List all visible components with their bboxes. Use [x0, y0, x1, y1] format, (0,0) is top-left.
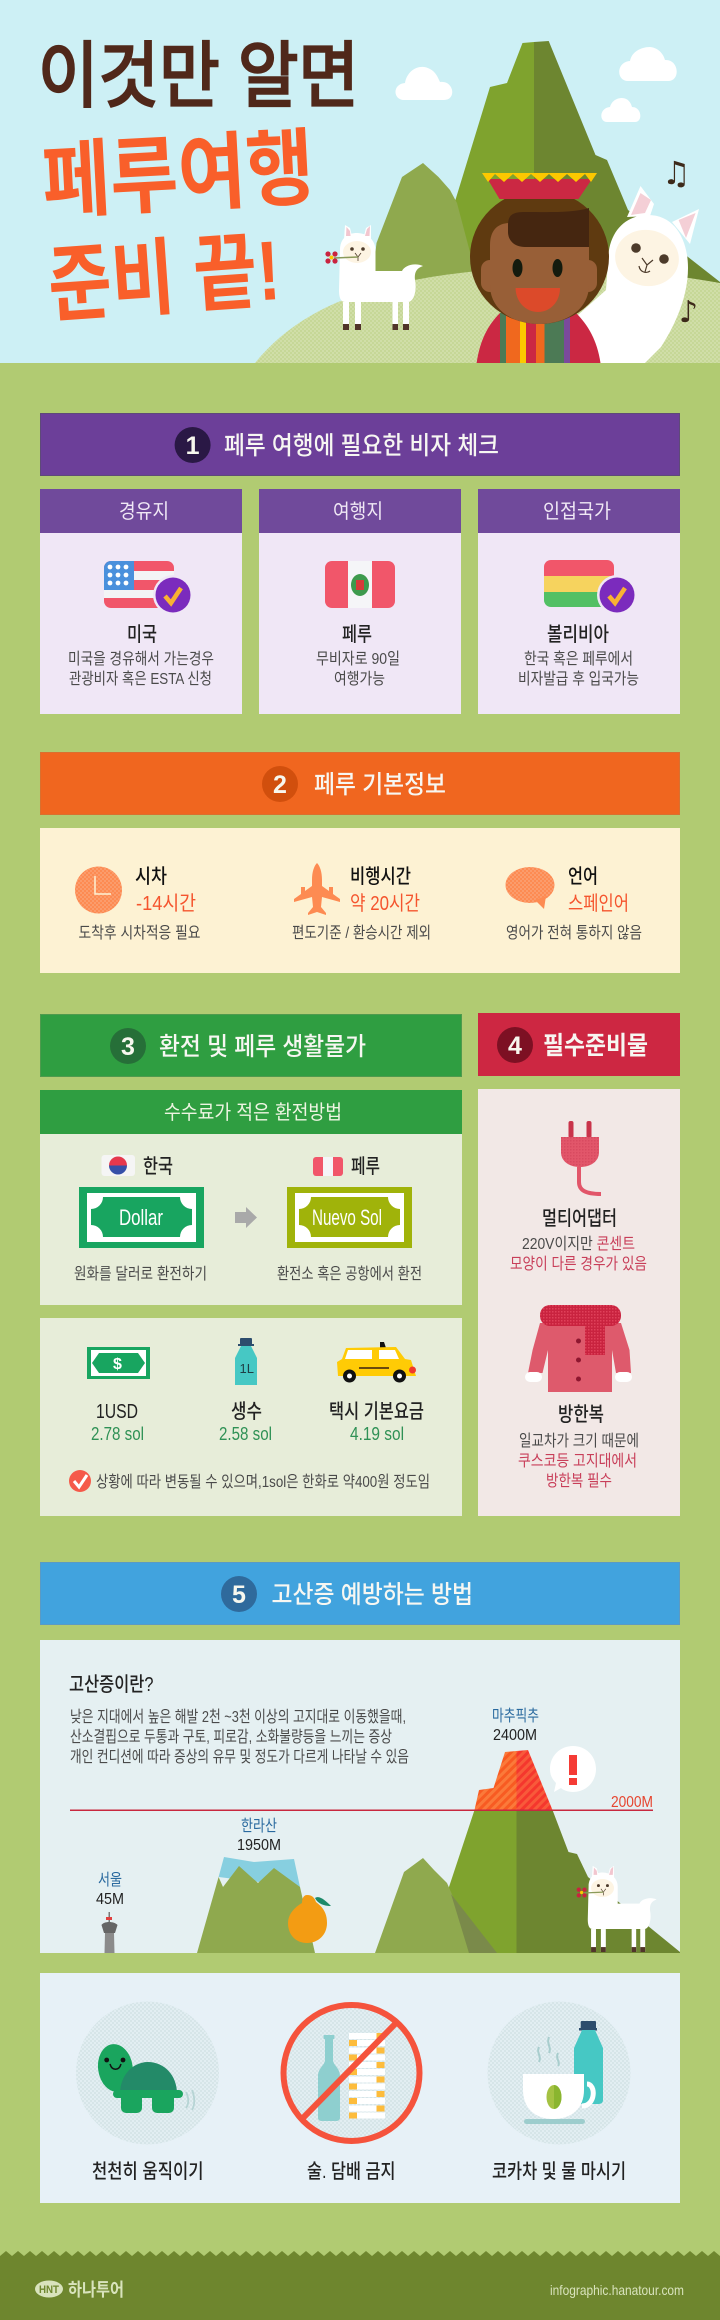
info: flight time: [292, 863, 431, 942]
panel: exchange method: 원화를 달러로 환전하기: [74, 1265, 207, 1283]
hill: [255, 268, 720, 363]
panel: altitude sickness: 45M: [96, 1891, 124, 1908]
icon: cloud 3: [601, 98, 640, 122]
panel: essentials: 방한복: [558, 1403, 604, 1426]
mountain: Machu Picchu: [425, 1750, 680, 1953]
title line 2: 페루여행: [40, 121, 316, 229]
panel: basic info: [40, 828, 680, 973]
tip: no alcohol or tobacco: 술. 담배 금지: [307, 2160, 396, 2183]
icon: prohibition sign: [284, 2005, 420, 2141]
panel: neighbouring country: [478, 489, 680, 714]
panel: essentials: [478, 1089, 680, 1516]
panel: essentials: 쿠스코등 고지대에서: [518, 1452, 637, 1470]
panel: essentials: 220V이지만 콘센트: [522, 1235, 635, 1253]
panel: altitude sickness: [40, 1640, 680, 1953]
section 1 header: 1: [186, 432, 200, 460]
tip: no alcohol or tobacco: [284, 2005, 420, 2183]
icon: steam: [538, 2037, 559, 2066]
panel: transit country: 미국을 경유해서 가는경우: [68, 650, 214, 668]
section 1 header: 페루 여행에 필요한 비자 체크: [224, 432, 499, 460]
info: language: [506, 865, 642, 942]
icon: winter coat: [525, 1305, 632, 1392]
title line 1: 이것만 알면: [38, 37, 359, 117]
mountain: foreground peak: [375, 1858, 469, 1953]
mountain: small peak: [370, 163, 480, 320]
panel: neighbouring country: 비자발급 후 입국가능: [518, 670, 639, 688]
icon: water bottle large: [574, 2021, 603, 2104]
info: time difference: 도착후 시차적응 필요: [78, 924, 200, 942]
icon: dollar bill: Dollar: [119, 1205, 163, 1230]
panel: living costs: 4.19 sol: [350, 1424, 404, 1444]
icon: Korea flag: [102, 1155, 135, 1176]
icon: water bottle: [235, 1338, 257, 1385]
title line 3: 준비 끝!: [45, 223, 283, 333]
panel: destination country: 여행가능: [334, 670, 385, 688]
info: language: 스페인어: [568, 892, 629, 915]
section 5 header: [40, 1562, 680, 1624]
section 3 header: 환전 및 페루 생활물가: [159, 1033, 366, 1061]
title: [38, 37, 359, 333]
panel: exchange method: 환전소 혹은 공항에서 환전: [277, 1265, 422, 1283]
icon: tea cup: [523, 2074, 593, 2124]
panel: living costs: 생수: [231, 1400, 262, 1423]
icon: Bolivia flag with check badge: [544, 560, 637, 615]
section 3 header: [40, 1014, 462, 1076]
panel: altitude sickness: 서울: [98, 1871, 122, 1889]
tip: move slowly: 천천히 움직이기: [92, 2160, 204, 2183]
footer: [0, 2251, 720, 2320]
panel: exchange method: 한국: [143, 1155, 173, 1178]
tip: drink coca tea and water: 코카차 및 물 마시기: [492, 2160, 626, 2183]
mountain: Hallasan: [197, 1857, 315, 1953]
description text: 산소결핍으로 두통과 구토, 피로감, 소화불량등을 느끼는 증상: [70, 1728, 392, 1746]
logo: [35, 2280, 124, 2300]
panel: altitude sickness: 2400M: [493, 1727, 537, 1744]
panel: living costs: 2.58 sol: [219, 1424, 272, 1444]
panel: altitude sickness: 2000M: [611, 1794, 653, 1811]
icon: small dollar bill: [87, 1347, 150, 1379]
panel: destination country: 페루: [342, 623, 372, 646]
panel: neighbouring country: 한국 혹은 페루에서: [524, 650, 633, 668]
info: time difference: -14시간: [136, 892, 196, 915]
panel: destination country: 무비자로 90일: [316, 650, 400, 668]
altitude line: [70, 1810, 653, 1811]
icon: Peru flag small: [313, 1157, 343, 1176]
panel: destination country: [259, 489, 461, 714]
icon: tangerine: [288, 1895, 331, 1943]
tip: move slowly: [76, 2002, 219, 2183]
icon: cigarettes: [349, 2033, 385, 2118]
icon: taxi: [337, 1342, 416, 1382]
section 1 header: [40, 414, 680, 476]
mountain shadow: [451, 1894, 497, 1953]
info: flight time: 비행시간: [350, 865, 411, 888]
panel: neighbouring country: 인접국가: [543, 500, 611, 523]
panel: essentials: 일교차가 크기 때문에: [519, 1432, 639, 1450]
section 2 header: [40, 752, 680, 814]
icon: arrow: [235, 1207, 257, 1228]
hero illustration: [0, 0, 720, 363]
section 4 header: [478, 1013, 680, 1076]
panel: living costs: 2.78 sol: [91, 1424, 144, 1444]
section 4 header: 필수준비물: [543, 1032, 648, 1060]
panel: essentials: 모양이 다른 경우가 있음: [510, 1255, 647, 1273]
panel: transit country: 관광비자 혹은 ESTA 신청: [69, 670, 212, 688]
icon: nuevo sol bill: Nuevo Sol: [312, 1205, 382, 1230]
panel: living costs: 택시 기본요금: [329, 1400, 424, 1423]
panel: transit country: [40, 489, 242, 714]
llama on mountain: [577, 1866, 657, 1952]
panel: living costs: 1USD: [96, 1401, 138, 1423]
icon: cloud 1: [396, 67, 452, 100]
icon: music note lower: ♪: [679, 295, 698, 330]
panel: essentials: 방한복 필수: [546, 1472, 612, 1490]
panel: essentials: 멀티어댑터: [542, 1207, 617, 1230]
panel: living costs: [40, 1318, 462, 1516]
icon: check note: [69, 1470, 91, 1492]
panel: living costs: 상황에 따라 변동될 수 있으며,1sol은 한화로 약400원 정도임: [96, 1473, 430, 1491]
character: Peruvian person: [470, 173, 609, 363]
info: flight time: 약 20시간: [350, 892, 420, 915]
section 5 header: 고산증 예방하는 방법: [272, 1581, 473, 1609]
icon: turtle: [95, 2042, 194, 2113]
panel: altitude sickness: 마추픽추: [492, 1707, 539, 1725]
icon: music note upper: ♫: [662, 154, 691, 192]
section 3 header: 3: [121, 1033, 135, 1061]
description text: 개인 컨디션에 따라 증상의 유무 및 정도가 다르게 나타날 수 있음: [70, 1748, 409, 1766]
icon: nuevo sol bill: [287, 1187, 412, 1248]
mountain: large peak: [420, 41, 720, 330]
logo: HNT: [39, 2284, 59, 2296]
section 2 header: 페루 기본정보: [314, 771, 446, 799]
panel: transit country: 경유지: [119, 500, 169, 523]
section 4 header: 4: [508, 1032, 522, 1060]
icon: small dollar bill: $: [113, 1356, 122, 1373]
icon: Seoul tower: [102, 1912, 118, 1953]
icon: plug: [561, 1121, 601, 1194]
icon: liquor bottle: [318, 2035, 340, 2121]
icon: water bottle: 1L: [240, 1361, 254, 1376]
icon: cloud 2: [619, 47, 677, 81]
panel: exchange method: 수수료가 적은 환전방법: [164, 1101, 342, 1124]
panel: altitude sickness: 고산증이란?: [69, 1673, 154, 1696]
panel: altitude sickness: 한라산: [241, 1817, 277, 1835]
panel: prevention tips: [40, 1973, 680, 2203]
panel: altitude sickness: 1950M: [237, 1837, 281, 1854]
logo: 하나투어: [68, 2280, 124, 2300]
description text: [70, 1708, 409, 1766]
info: time difference: [75, 865, 200, 942]
icon: Peru flag: [325, 561, 395, 608]
tip: drink coca tea and water: [488, 2002, 630, 2183]
panel: destination country: 여행지: [333, 500, 383, 523]
website url: infographic.hanatour.com: [550, 2282, 684, 2298]
panel: neighbouring country: 볼리비아: [547, 623, 609, 646]
info: flight time: 편도기준 / 환승시간 제외: [292, 924, 431, 942]
panel: exchange method: [40, 1090, 462, 1305]
info: time difference: 시차: [135, 865, 167, 888]
small llama: [325, 225, 423, 330]
info: language: 언어: [568, 865, 598, 888]
panel: exchange method: 페루: [351, 1155, 380, 1178]
icon: US flag with check badge: [104, 561, 193, 615]
callout: warning bubble: [550, 1746, 596, 1792]
description text: 낮은 지대에서 높은 해발 2천 ~3천 이상의 고지대로 이동했을때,: [70, 1708, 406, 1726]
section 5 header: 5: [232, 1581, 246, 1609]
panel: transit country: 미국: [127, 623, 157, 646]
big llama: [578, 186, 699, 363]
info: language: 영어가 전혀 통하지 않음: [506, 924, 642, 942]
icon: dollar bill: [79, 1187, 204, 1248]
section 2 header: 2: [273, 771, 287, 799]
